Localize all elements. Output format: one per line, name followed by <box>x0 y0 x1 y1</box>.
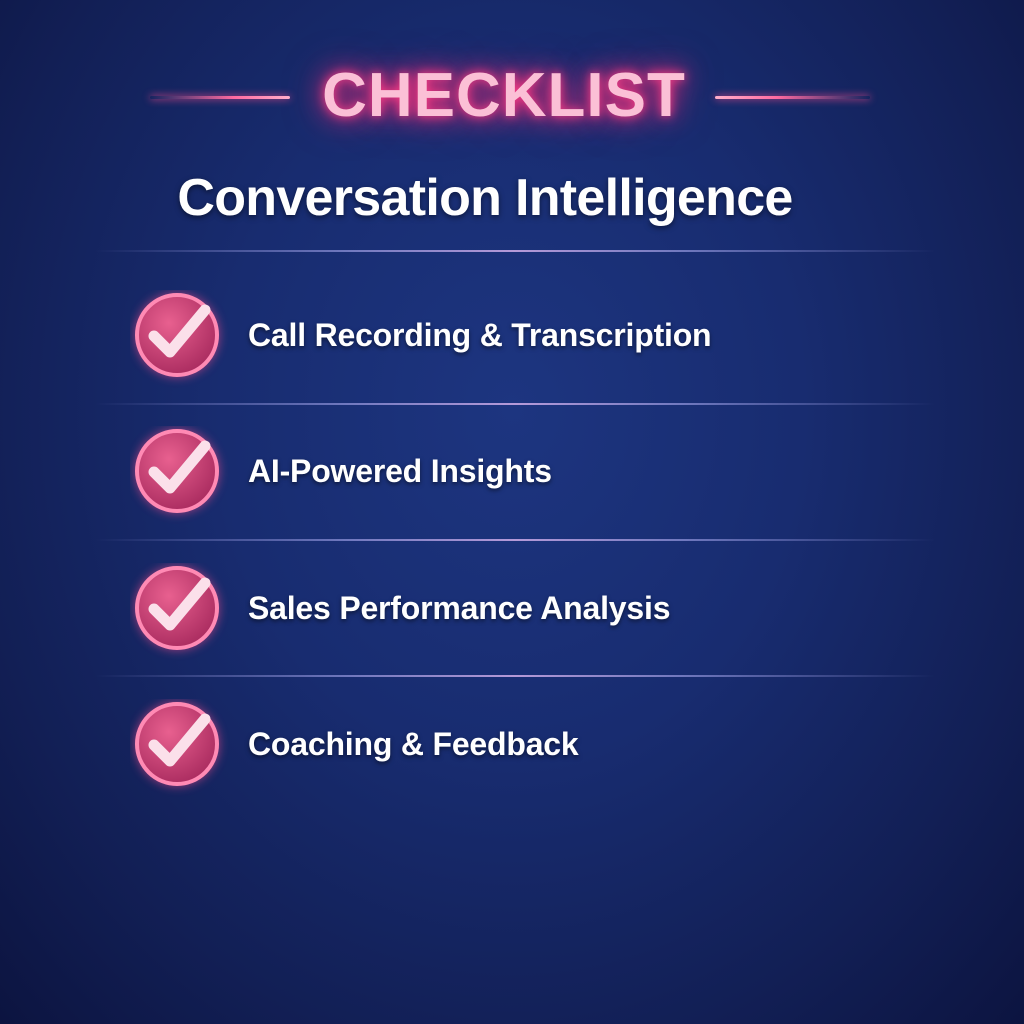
title: CHECKLIST <box>322 61 686 130</box>
icon: check <box>130 563 226 657</box>
icon: check <box>130 426 226 520</box>
icon: check <box>130 699 226 793</box>
icon: check <box>130 290 226 384</box>
item 2 <box>130 426 552 520</box>
title <box>146 48 874 140</box>
item 3 <box>130 563 671 657</box>
item 4 <box>130 699 580 793</box>
text: AI-Powered Insights <box>248 453 552 489</box>
text: Sales Performance Analysis <box>248 590 670 626</box>
text: Call Recording & Transcription <box>248 317 711 353</box>
text: Coaching & Feedback <box>248 726 578 762</box>
item 1 <box>130 290 712 384</box>
subtitle: Conversation Intelligence <box>177 169 793 227</box>
